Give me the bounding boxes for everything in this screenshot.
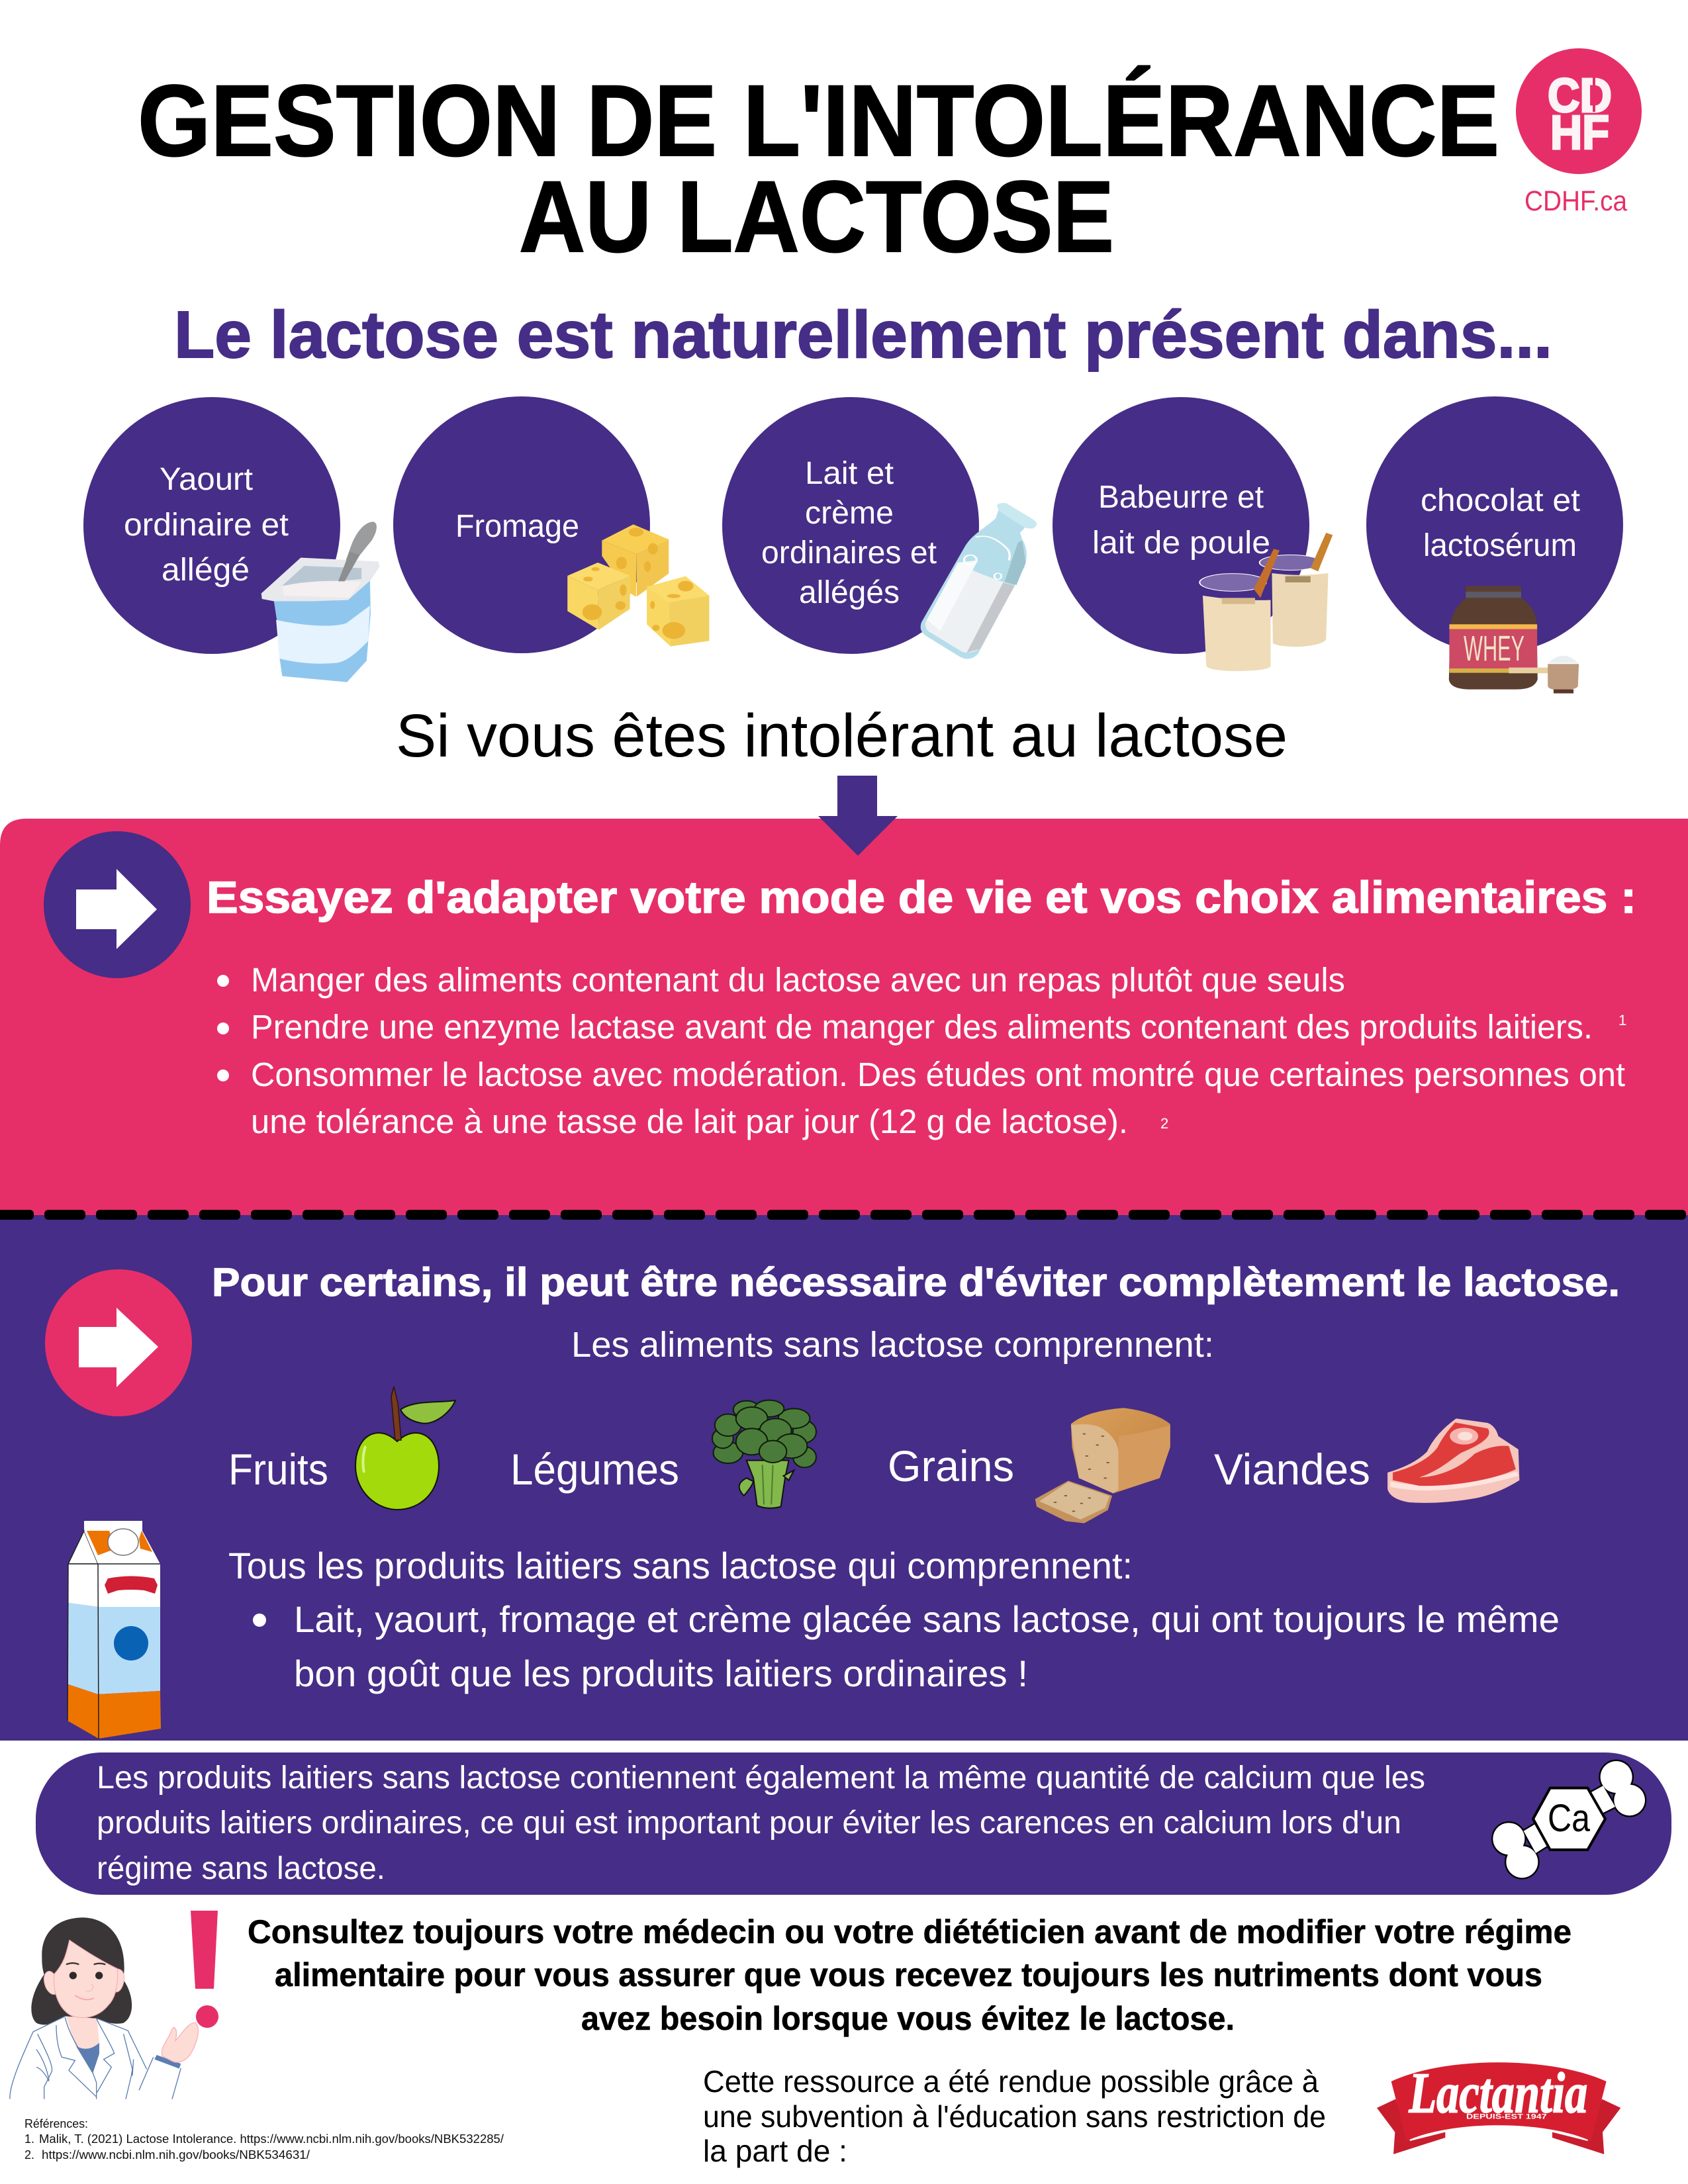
- icon: yogurt: [261, 522, 379, 682]
- icon: whey jar: [1449, 586, 1579, 694]
- title: [138, 64, 1499, 273]
- source: fromage circle: Fromage: [455, 509, 579, 544]
- text: references: 2.: [24, 2148, 34, 2161]
- text: consult doctor: Consultez toujours votre médecin ou votre diététicien avant de modifier votre régime: [248, 1913, 1571, 1950]
- logo: CDHF: CD: [1548, 69, 1612, 122]
- source: fromage circle: [393, 396, 650, 653]
- icon: broccoli: [712, 1400, 816, 1508]
- bullet list: adapt: [217, 961, 1626, 1140]
- icon: calcium molecule: Ca: [1548, 1797, 1591, 1840]
- icon: calcium molecule: [1493, 1761, 1645, 1878]
- bullet list: adapt: Consommer le lactose avec modération. Des études ont montré que certaines personnes ont: [251, 1056, 1625, 1093]
- icon: arrow circle: [44, 831, 191, 978]
- bullet list: dairy: Lait, yaourt, fromage et crème glacée sans lactose, qui ont toujours le même: [294, 1598, 1560, 1640]
- source: babeurre circle: [1053, 397, 1309, 654]
- logo: CDHF: [1516, 48, 1642, 217]
- text: calcium note: [97, 1760, 1425, 1886]
- text: consult doctor: alimentaire pour vous assurer que vous recevez toujours les nutriments dont vous: [275, 1956, 1542, 1993]
- source: lait circle: crème: [805, 496, 894, 531]
- source: babeurre circle: Babeurre et: [1098, 480, 1264, 515]
- text: sponsor note: Cette ressource a été rendue possible grâce à: [703, 2064, 1319, 2099]
- illustration: doctor: [9, 1917, 198, 2099]
- text: calcium note: régime sans lactose.: [97, 1851, 385, 1886]
- icon: cheese: [567, 524, 709, 647]
- icon: milk bottle: [921, 503, 1037, 659]
- text: references: 1.: [24, 2132, 34, 2146]
- source: yaourt circle: Yaourt: [160, 462, 253, 497]
- label: grains: Grains: [888, 1441, 1014, 1490]
- text: consult doctor: avez besoin lorsque vous évitez le lactose.: [581, 2000, 1235, 2037]
- callout: calcium: [36, 1752, 1671, 1895]
- heading: avoid: Pour certains, il peut être nécessaire d'éviter complètement le lactose.: [212, 1260, 1620, 1304]
- text: references: https://www.ncbi.nlm.nih.gov/books/NBK534631/: [42, 2148, 310, 2161]
- source: lait circle: [722, 397, 979, 654]
- icon: exclamation mark: [191, 1911, 218, 2028]
- text: sponsor note: la part de :: [703, 2134, 847, 2168]
- icon: arrow circle: [45, 1269, 192, 1416]
- bullet list: adapt: 2: [1160, 1115, 1168, 1132]
- bullet list: dairy: [253, 1598, 1560, 1694]
- source: yaourt circle: ordinaire et: [124, 508, 289, 543]
- bullet list: adapt: Prendre une enzyme lactase avant de manger des aliments contenant des produits laitiers.: [251, 1008, 1593, 1046]
- icon: whey jar: WHEY: [1464, 629, 1524, 668]
- text: consult doctor: [248, 1913, 1571, 2037]
- panel: lactose sources: [83, 396, 1623, 694]
- intro line: Si vous êtes intolérant au lactose: [396, 702, 1288, 770]
- icon: bread: [1035, 1408, 1170, 1524]
- icon: apple: [355, 1387, 455, 1510]
- source: yaourt circle: allégé: [162, 553, 250, 588]
- text: sponsor note: une subvention à l'éducation sans restriction de: [703, 2099, 1326, 2134]
- icon: meat: [1387, 1418, 1519, 1503]
- logo: Lactantia: Lactantia: [1409, 2062, 1587, 2125]
- source: lait circle: ordinaires et: [761, 535, 937, 570]
- source: chocolat circle: chocolat et: [1421, 483, 1580, 518]
- source: lait circle: allégés: [799, 575, 900, 610]
- heading: adapt: Essayez d'adapter votre mode de vie et vos choix alimentaires :: [207, 872, 1636, 923]
- text: references: [24, 2117, 504, 2161]
- logo: Lactantia: [1377, 2062, 1620, 2154]
- label: fruits: Fruits: [228, 1445, 328, 1494]
- bullet list: dairy: bon goût que les produits laitiers ordinaires !: [294, 1653, 1028, 1694]
- subheading: Le lactose est naturellement présent dans...: [174, 298, 1552, 372]
- text: calcium note: Les produits laitiers sans lactose contiennent également la même quantité de calcium que les: [97, 1760, 1425, 1796]
- title: AU LACTOSE: [519, 160, 1114, 273]
- source: chocolat circle: lactosérum: [1423, 528, 1577, 563]
- text: lactose-free dairy: Tous les produits laitiers sans lactose qui comprennent:: [228, 1545, 1133, 1586]
- source: chocolat circle: [1366, 396, 1623, 653]
- bullet list: adapt: 1: [1618, 1012, 1626, 1028]
- text: calcium note: produits laitiers ordinaires, ce qui est important pour éviter les carences en calcium lors d'un: [97, 1805, 1401, 1841]
- panel: avoid lactose: [0, 1215, 1688, 1741]
- logo: CDHF: CDHF.ca: [1524, 185, 1627, 217]
- title: GESTION DE L'INTOLÉRANCE: [138, 64, 1499, 177]
- bullet list: adapt: une tolérance à une tasse de lait par jour (12 g de lactose).: [251, 1103, 1128, 1140]
- label: viandes: Viandes: [1214, 1445, 1370, 1494]
- source: babeurre circle: lait de poule: [1092, 525, 1270, 561]
- text: sponsor note: [703, 2064, 1326, 2168]
- icon: eggnog glasses: [1199, 533, 1333, 671]
- arrow: down to panel: [818, 776, 898, 856]
- panel: adapt lifestyle: [0, 819, 1688, 1218]
- label: legumes: Légumes: [510, 1445, 679, 1494]
- text: foods intro: Les aliments sans lactose comprennent:: [571, 1325, 1214, 1365]
- logo: CDHF: HF: [1550, 107, 1609, 159]
- bullet list: adapt: Manger des aliments contenant du lactose avec un repas plutôt que seuls: [251, 961, 1345, 999]
- text: references: Malik, T. (2021) Lactose Intolerance. https://www.ncbi.nlm.nih.gov/books/NBK532285/: [39, 2132, 504, 2146]
- text: references: Références:: [24, 2117, 88, 2130]
- source: yaourt circle: [83, 397, 340, 654]
- logo: Lactantia: DEPUIS-EST 1947: [1466, 2113, 1547, 2121]
- source: lait circle: Lait et: [805, 456, 894, 491]
- icon: milk carton: [68, 1521, 161, 1739]
